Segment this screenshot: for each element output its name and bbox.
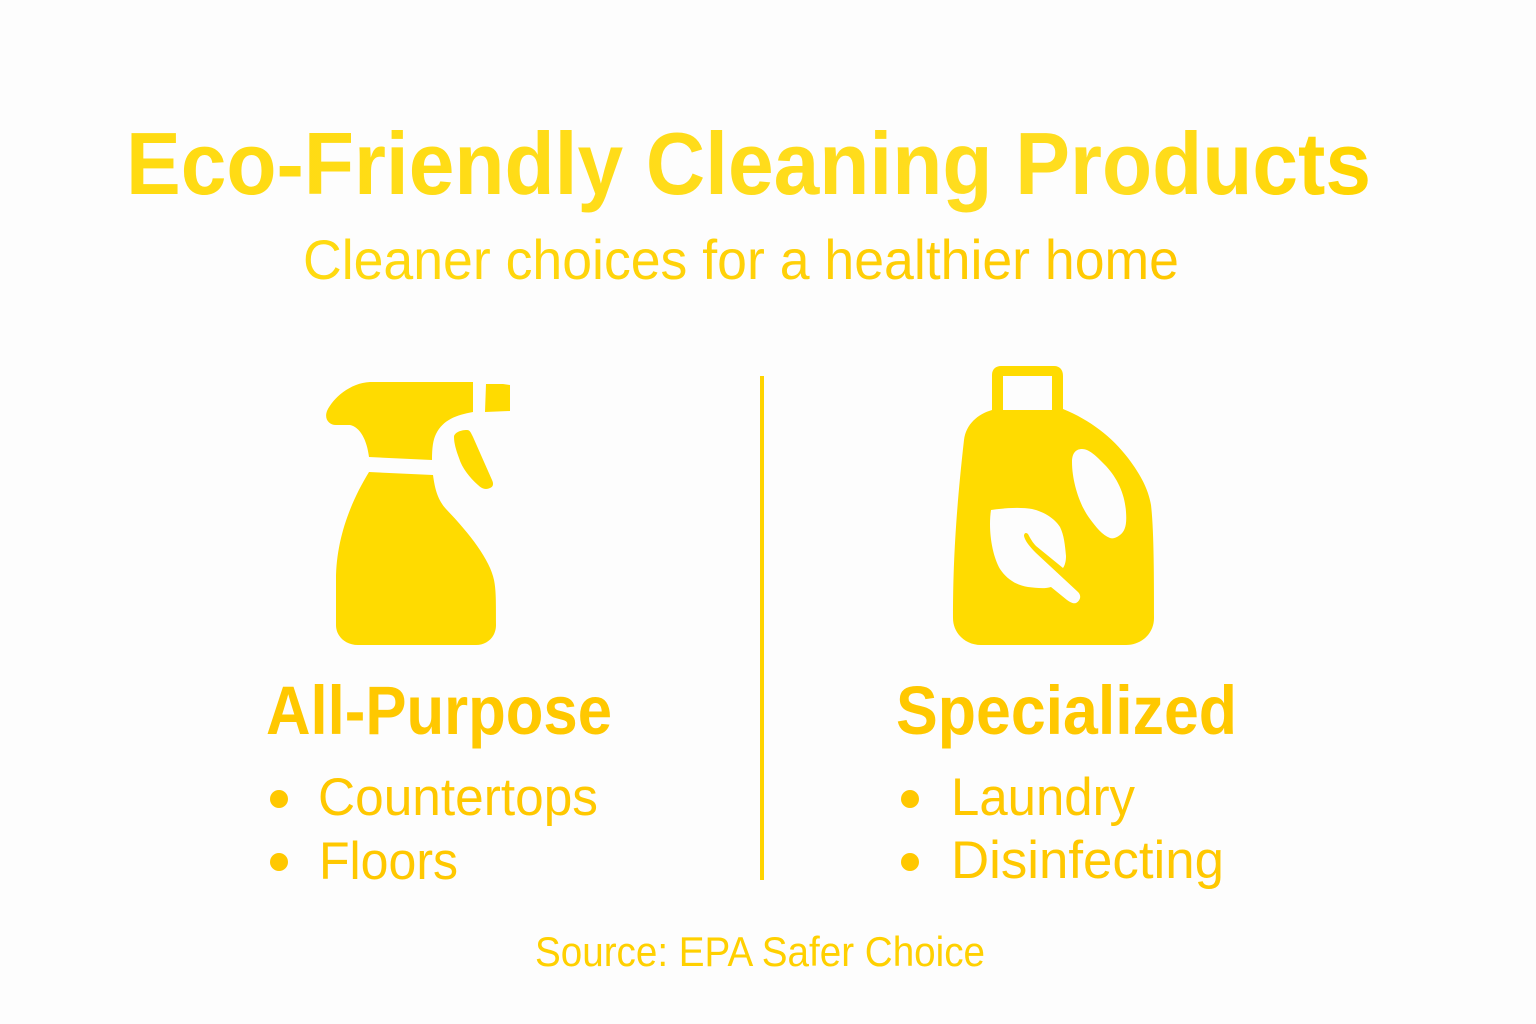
list: all-purpose uses: Floors	[319, 832, 458, 891]
heading: Specialized: Specialized	[896, 672, 1237, 749]
icon: spray bottle	[326, 382, 510, 645]
list: specialized uses: Laundry	[951, 768, 1135, 827]
title: Eco-Friendly Cleaning Products	[126, 114, 1371, 213]
list: all-purpose uses: Countertops	[318, 768, 598, 827]
subtitle: Cleaner choices for a healthier home	[303, 228, 1179, 291]
divider	[760, 376, 764, 880]
heading: All-Purpose: All-Purpose	[266, 672, 612, 749]
icon: detergent jug with leaf	[953, 366, 1154, 645]
list: specialized uses: Disinfecting	[951, 831, 1224, 890]
list: specialized uses	[901, 768, 1224, 890]
source: Source: EPA Safer Choice	[535, 928, 985, 975]
list: all-purpose uses	[270, 768, 598, 891]
